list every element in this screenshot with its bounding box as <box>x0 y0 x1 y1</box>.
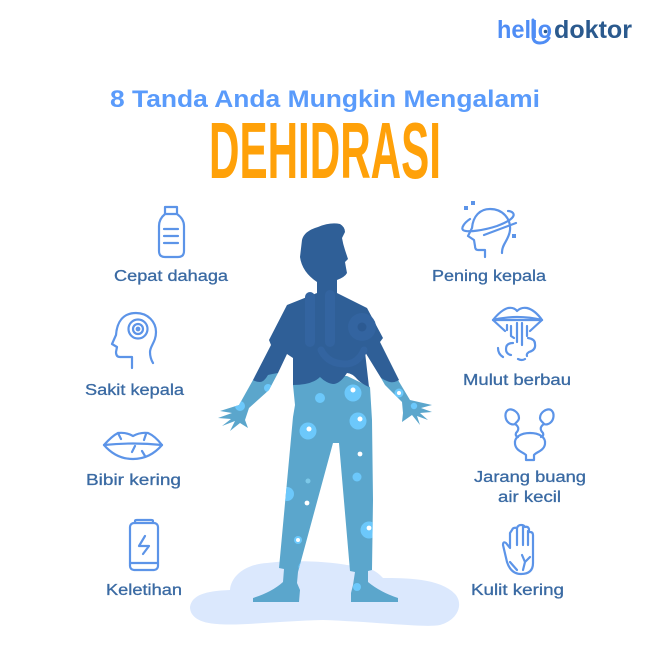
icon: dry hand <box>503 525 533 574</box>
icon: kidneys and bladder <box>505 409 554 460</box>
icon: head with target <box>112 313 156 368</box>
bubbles <box>235 384 417 591</box>
icon dots <box>464 201 516 238</box>
icon: mouth with odor <box>493 308 542 360</box>
icon: water bottle <box>159 207 184 257</box>
sign: mulut berbau <box>463 308 571 389</box>
logo: hellodoktor: hello <box>497 16 552 44</box>
sign: keletihan <box>106 520 182 599</box>
sign: cepat dahaga <box>114 207 228 285</box>
ground cloud <box>190 561 459 626</box>
title line: 8 Tanda Anda Mungkin Mengalami <box>110 86 540 113</box>
heading: dehidrasi: DEHIDRASI <box>209 106 441 195</box>
label line 2: air kecil <box>498 489 561 506</box>
icon: low battery <box>130 520 158 570</box>
label: Mulut berbau <box>463 372 571 389</box>
logo: hellodoktor: doktor <box>554 16 632 44</box>
label: Sakit kepala <box>85 382 184 399</box>
label: Kulit kering <box>471 582 564 599</box>
upper body: dark <box>253 223 399 387</box>
figure: human silhouette <box>190 223 459 626</box>
sign: jarang buang air kecil <box>474 409 586 506</box>
sign: pening kepala <box>432 201 546 285</box>
label: Pening kepala <box>432 268 546 285</box>
label line 1: Jarang buang <box>474 469 586 486</box>
icon: dry lips <box>104 433 162 459</box>
label: Bibir kering <box>86 472 181 489</box>
label: Keletihan <box>106 582 182 599</box>
stethoscope watermark <box>310 295 376 364</box>
logo: hellodoktor <box>497 16 632 44</box>
sign: kulit kering <box>471 525 564 599</box>
label: Cepat dahaga <box>114 268 228 285</box>
icon: dizzy head <box>462 209 516 257</box>
sign: sakit kepala <box>85 313 184 399</box>
lower body: water <box>218 372 432 602</box>
sign: bibir kering <box>86 433 181 489</box>
